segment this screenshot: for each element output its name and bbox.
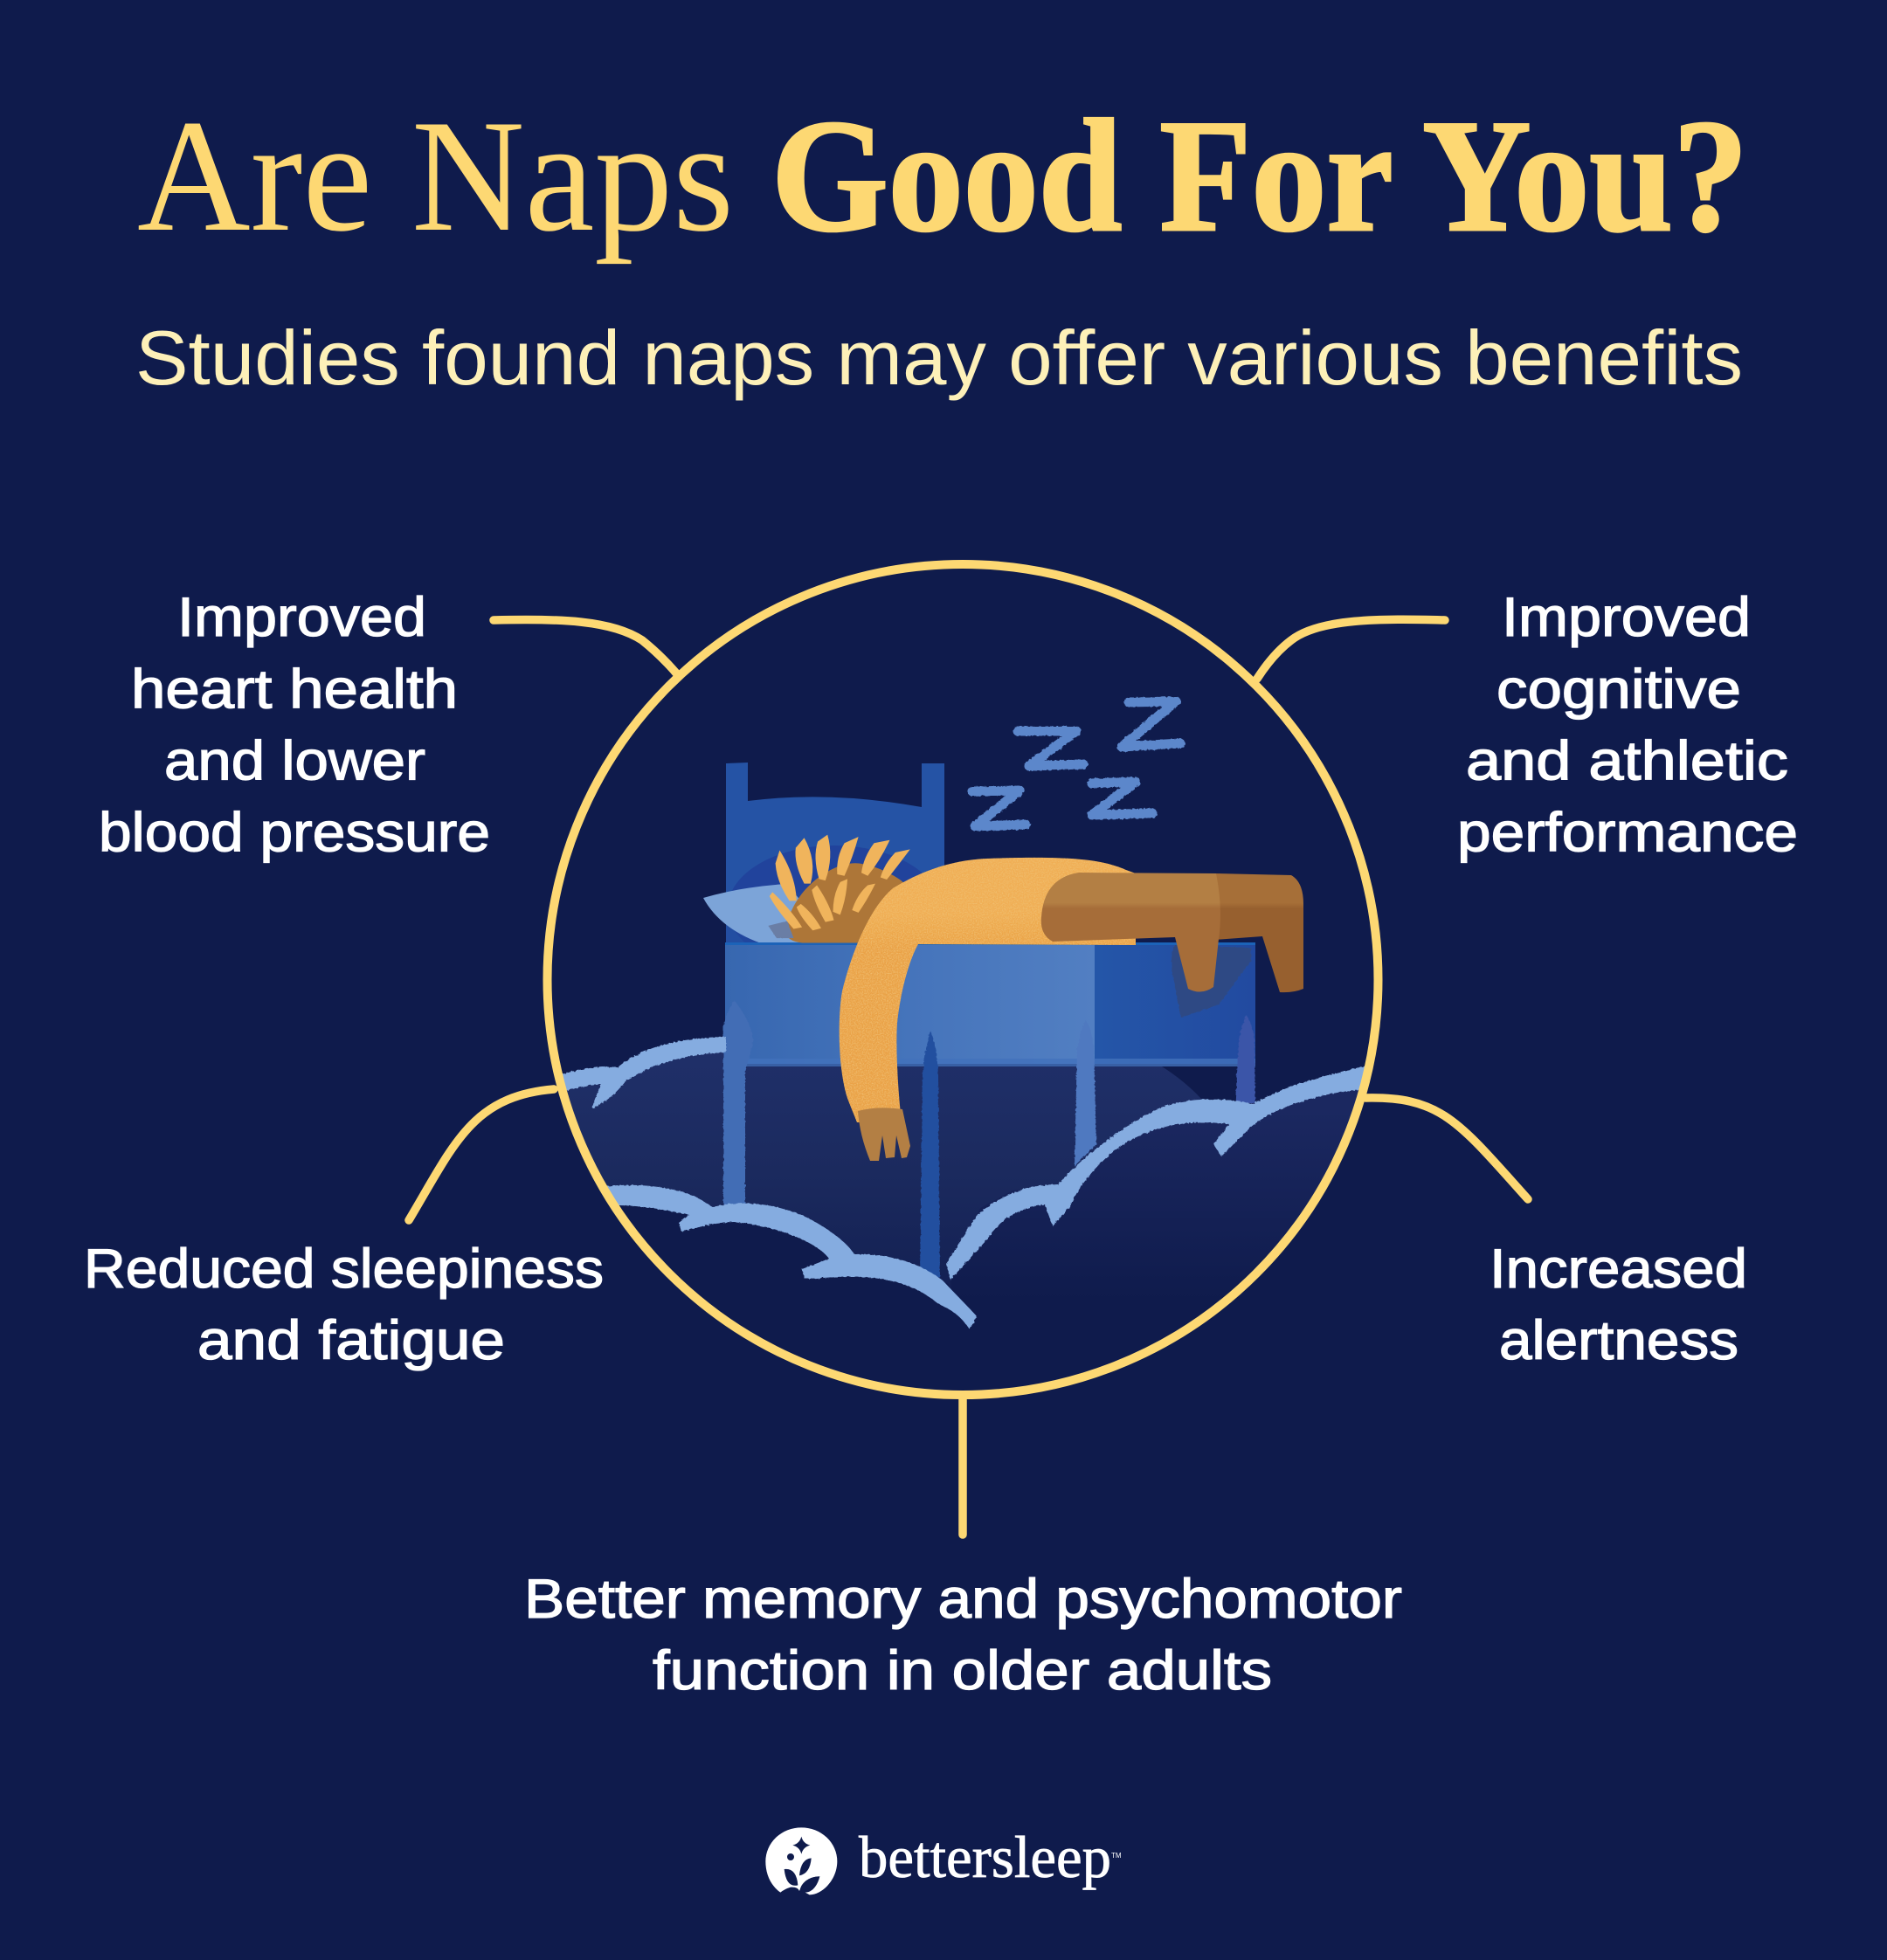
- bed legs: [723, 1001, 1255, 1277]
- label: cognitive performance: [1457, 587, 1798, 863]
- label: alertness: alertness: [1499, 1310, 1738, 1371]
- back leg: [1214, 873, 1303, 992]
- connectors: [409, 619, 1528, 1535]
- subtitle: Studies found naps may offer various benefits: [135, 314, 1743, 401]
- under-bed shadow: [567, 1052, 1202, 1275]
- illustration: napping person on bed over clouds: [563, 763, 1365, 1329]
- wordmark: bettersleep: [859, 1824, 1111, 1890]
- label: heart health: [99, 587, 490, 863]
- front leg: [1041, 873, 1220, 992]
- clouds: [559, 1037, 1367, 1329]
- label: heart health: heart health: [131, 659, 458, 720]
- trademark: TM: [1111, 1852, 1122, 1860]
- lower fill under right cloud: [1248, 1101, 1260, 1104]
- zzz: [972, 701, 1180, 826]
- label: alertness: [1490, 1239, 1747, 1371]
- label: cognitive performance: and athletic: [1466, 730, 1788, 791]
- label: cognitive performance: performance: [1457, 802, 1798, 863]
- label: cognitive performance: cognitive: [1496, 659, 1741, 720]
- circle ring: [547, 564, 1379, 1395]
- icon: moon and sprout: [765, 1827, 837, 1894]
- headboard: [726, 763, 944, 942]
- pillow: [703, 884, 798, 942]
- head and hair: [768, 835, 910, 943]
- label: alertness: Increased: [1490, 1239, 1747, 1300]
- mattress: [725, 942, 1255, 1066]
- label: sleepiness and fatigue: [84, 1239, 604, 1371]
- logo: bettersleep: [765, 1824, 1122, 1894]
- lower fill under left cloud: [619, 1205, 856, 1275]
- title: Good For You?: [771, 86, 1748, 265]
- title: Are Naps: [137, 86, 734, 265]
- label: heart health: and lower: [164, 730, 425, 791]
- illustration figure: [768, 701, 1303, 1161]
- label: cognitive performance: Improved: [1502, 587, 1751, 648]
- label: memory and psychomotor: function in older adults: [653, 1640, 1272, 1701]
- label: sleepiness and fatigue: and fatigue: [197, 1310, 505, 1371]
- label: sleepiness and fatigue: Reduced sleepiness: [84, 1239, 604, 1300]
- hand: [858, 1108, 910, 1161]
- label: heart health: blood pressure: [99, 802, 490, 863]
- label: memory and psychomotor: Better memory and psychomotor: [524, 1569, 1402, 1630]
- title: [137, 86, 1748, 265]
- label: heart health: Improved: [177, 587, 426, 648]
- label: memory and psychomotor: [524, 1569, 1402, 1701]
- mattress shadow under legs: [1172, 945, 1251, 1018]
- arm and torso: [840, 858, 1136, 1122]
